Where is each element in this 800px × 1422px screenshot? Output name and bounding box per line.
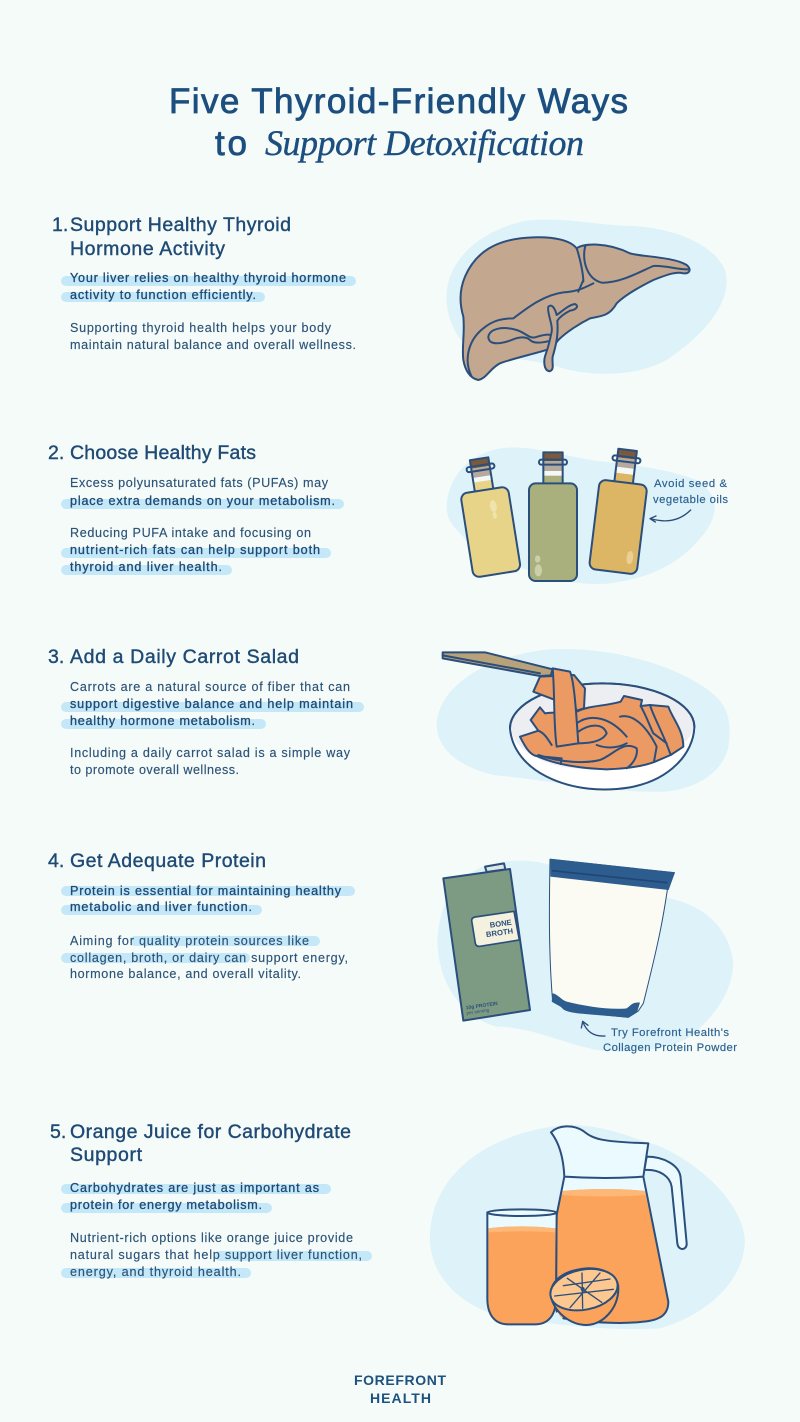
title: to	[215, 124, 247, 163]
text block: step 4 body: collagen, broth, or dairy can support energy,	[70, 951, 348, 965]
icon: glass	[487, 1209, 557, 1324]
icon: carton: per serving	[466, 1007, 490, 1016]
icon: right bottle	[589, 447, 651, 575]
text block: step 5 body: protein for energy metabolism.	[70, 1198, 262, 1212]
panel: step 1 text	[52, 214, 356, 352]
text block: step 3 body: to promote overall wellness.	[70, 763, 239, 777]
icon: carrot salad bowl	[437, 649, 730, 792]
text block: step 2 body: thyroid and liver health.	[70, 560, 222, 574]
heading: step 1: Support Healthy Thyroid	[70, 214, 291, 236]
arrow: collagen callout	[581, 1021, 605, 1036]
callout: try collagen protein powder: Try Forefront Health's	[611, 1027, 729, 1039]
heading: step 3: 3.	[48, 646, 64, 668]
icon: pouch	[549, 859, 675, 1018]
heading: step 1: Hormone Activity	[70, 238, 225, 260]
icon: oil bottles	[447, 447, 715, 584]
text block: step 2 body	[61, 476, 344, 575]
panel: step 5 text	[50, 1121, 372, 1279]
text block: step 3 body: healthy hormone metabolism.	[70, 714, 255, 728]
callout: try collagen protein powder: Collagen Protein Powder	[603, 1042, 737, 1054]
icon: carton: 10g PROTEIN	[465, 1001, 498, 1011]
text block: step 3 body: Carrots are a natural source of fiber that can	[70, 680, 350, 694]
callout: avoid seed and vegetable oils: vegetable oils	[653, 494, 728, 506]
callout: avoid seed and vegetable oils: Avoid seed &	[654, 478, 727, 490]
icon: bone broth carton and collagen pouch	[437, 859, 733, 1051]
title: Support Detoxification	[265, 123, 584, 163]
text block: step 3 body: Including a daily carrot salad is a simple way	[70, 746, 351, 760]
text block: step 1 body: activity to function efficiently.	[70, 288, 256, 302]
icon: carton: BROTH	[485, 926, 514, 939]
panel: step 2 text	[48, 442, 344, 575]
heading: step 3: Add a Daily Carrot Salad	[70, 646, 299, 668]
logo: Forefront Health: HEALTH	[370, 1390, 431, 1406]
icon: liver	[447, 220, 727, 380]
text block: step 2 body: Reducing PUFA intake and focusing on	[70, 526, 311, 540]
heading: step 5: Orange Juice for Carbohydrate	[70, 1121, 351, 1143]
text block: step 4 body: hormone balance, and overall vitality.	[70, 967, 301, 981]
title	[169, 82, 628, 163]
text block: step 5 body: natural sugars that help support liver function,	[70, 1248, 362, 1262]
text block: step 4 body: Protein is essential for maintaining healthy	[70, 884, 342, 898]
icon: orange half	[547, 1264, 621, 1325]
text block: step 2 body: place extra demands on your metabolism.	[70, 494, 335, 508]
icon: pitcher handle	[644, 1157, 687, 1249]
panel: step 4 text	[48, 850, 355, 981]
text block: step 1 body: Supporting thyroid health helps your body	[70, 321, 332, 335]
logo: Forefront Health: FOREFRONT	[354, 1372, 446, 1388]
text block: step 1 body: maintain natural balance and overall wellness.	[70, 338, 356, 352]
text block: step 2 body: nutrient-rich fats can help support both	[70, 543, 320, 557]
arrow: oils callout	[650, 510, 691, 522]
icon: orange juice pitcher and glass	[430, 1125, 745, 1329]
heading: step 5: Support	[70, 1144, 143, 1166]
text block: step 5 body: energy, and thyroid health.	[70, 1265, 241, 1279]
callout: try collagen protein powder	[603, 1027, 737, 1054]
text block: step 1 body: Your liver relies on healthy thyroid hormone	[70, 271, 346, 285]
heading: step 4: Get Adequate Protein	[70, 850, 266, 872]
text block: step 1 body	[61, 271, 356, 352]
text block: step 5 body: Nutrient-rich options like orange juice provide	[70, 1231, 353, 1245]
heading: step 2: Choose Healthy Fats	[70, 442, 256, 464]
heading: step 5	[50, 1121, 351, 1166]
icon: pitcher	[551, 1126, 668, 1323]
text block: step 2 body: Excess polyunsaturated fats (PUFAs) may	[70, 476, 329, 490]
icon: carton	[443, 863, 530, 1021]
panel: step 3 text	[48, 646, 364, 777]
callout: avoid seed and vegetable oils	[653, 478, 728, 506]
text block: step 4 body: metabolic and liver function.	[70, 900, 252, 914]
icon: carton: BONE	[489, 918, 512, 930]
title: Five Thyroid-Friendly Ways	[169, 82, 628, 121]
text block: step 5 body: Carbohydrates are just as important as	[70, 1181, 319, 1195]
text block: step 3 body: support digestive balance and help maintain	[70, 697, 353, 711]
text block: step 4 body	[61, 884, 355, 981]
text block: step 3 body	[61, 680, 364, 777]
logo: Forefront Health	[354, 1372, 446, 1406]
heading: step 1	[52, 214, 291, 260]
icon: centre bottle	[529, 452, 577, 581]
heading: step 4: 4.	[48, 850, 64, 872]
text block: step 4 body: Aiming for quality protein sources like	[70, 934, 309, 948]
heading: step 5: 5.	[50, 1121, 66, 1143]
text block: step 5 body	[61, 1181, 372, 1279]
heading: step 2: 2.	[48, 442, 64, 464]
icon: left bottle	[455, 455, 521, 578]
heading: step 1: 1.	[52, 214, 68, 236]
